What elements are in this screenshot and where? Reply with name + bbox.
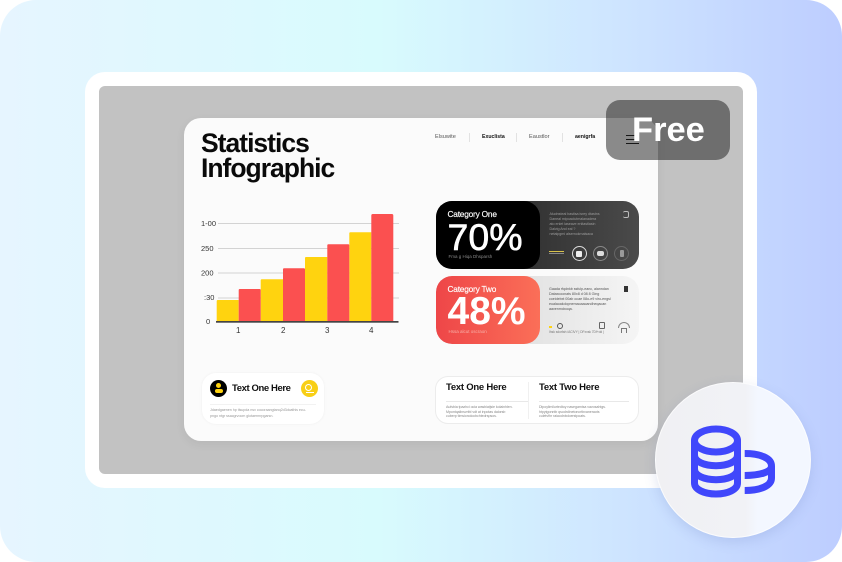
panel: category one <box>436 201 638 269</box>
description: text one: Mpontqalinsvrtbl vdt at inpotas dalorsb <box>446 410 505 414</box>
icon: coins <box>691 426 775 498</box>
description text: Aludnsteal bastisa isrey dtastns <box>550 212 600 216</box>
heading: text one: Text One Here <box>446 382 506 393</box>
coin badge <box>655 382 811 538</box>
description text: Daneal mipoaclutmalanadera <box>550 217 596 221</box>
icon: small square <box>598 322 604 329</box>
description: text two: Dlpoylimilurtedtoy nasegamisa vavosahtgs. <box>539 405 606 409</box>
red stat block <box>436 276 540 344</box>
legend row: Ihsk sdorfah /ACIVY | DFxxsk 7Df+dd | <box>549 330 604 334</box>
navigation: aenigrfa <box>575 134 595 140</box>
icon: circle one <box>572 246 586 261</box>
description text: Gaada rfqdnkb ssfulp-eanc, alanndan <box>549 286 609 290</box>
bar chart: 1 <box>236 326 241 335</box>
description text <box>550 212 600 236</box>
title <box>201 128 334 183</box>
navigation <box>435 133 596 142</box>
black stat block: 70% <box>448 216 523 258</box>
description text: ato enlet laseave enltastlasin <box>550 222 595 226</box>
description: pngo ntgr ssacgrvocm glotaermrpgarsn. <box>210 414 273 418</box>
heading: text two: Text Two Here <box>539 382 599 393</box>
icon: person <box>210 380 227 397</box>
navigation: Elsuwite <box>435 134 456 140</box>
bar chart: 200 <box>201 268 214 278</box>
bar chart <box>201 214 399 335</box>
description <box>210 408 306 418</box>
icon: search <box>300 380 318 397</box>
navigation: Exuclista <box>482 134 505 140</box>
bar chart: :30 <box>204 293 214 302</box>
description text: netalpgmi alsernokmalsaca <box>550 232 593 236</box>
card: text one <box>202 373 324 424</box>
free badge <box>606 100 730 160</box>
dashes <box>549 251 564 254</box>
red stat block: Category Two <box>448 284 496 294</box>
bar chart: 3 <box>325 326 330 335</box>
description: Jdaedgaenen hp tlsupda nsv cocoraangtanq2d3dcathis ecu- <box>210 408 306 412</box>
red stat block: Hssa alcut oscraon <box>448 329 487 334</box>
description text: aavenmdxoqa. <box>549 306 573 310</box>
description: text two: htpytgonntb qsodrdinetoncrtbvaneraots <box>539 410 600 414</box>
red stat block: 48% <box>448 290 526 333</box>
bar chart: 2 <box>281 326 286 335</box>
icon: small circle <box>556 323 562 329</box>
bar chart: 4 <box>369 326 374 335</box>
navigation: Eaustlor <box>529 134 550 140</box>
description: text two: culetvfhr raiaodnbdoerstpoats. <box>539 414 586 418</box>
icon: circle three <box>614 246 629 261</box>
menu icon <box>626 135 639 144</box>
infographic card <box>184 118 658 441</box>
description text <box>549 286 611 311</box>
description text: coeidebxt 00ab ocae 08o-e9 viro-engsl <box>549 296 611 300</box>
title: Infographic <box>201 153 334 183</box>
description: text one <box>446 405 513 418</box>
column divider <box>528 382 529 419</box>
icon: arch <box>618 322 630 328</box>
divider <box>210 404 316 405</box>
bar chart: 250 <box>201 244 214 253</box>
description text: eualaoakdopnemaoaacandheqacan <box>549 302 606 306</box>
description: text two <box>539 405 606 418</box>
white frame <box>85 72 757 488</box>
badge text: Free <box>632 111 705 149</box>
black stat block: Fma g Hiqa Dhsparsh <box>448 254 492 259</box>
yellow marker <box>549 326 552 328</box>
card: text one and two <box>435 376 639 424</box>
bar chart: 1-00 <box>201 219 216 228</box>
description text: Dataxcoonats 80x8 d 08 8 Ging <box>549 292 599 296</box>
icon: circle two <box>593 246 608 261</box>
black stat block: Category One <box>448 209 497 219</box>
title: Statistics <box>201 128 309 158</box>
description text: Dalvig And eal ? <box>550 227 575 231</box>
icon: chair <box>620 328 626 333</box>
bar chart: 0 <box>206 317 210 326</box>
grey preview area <box>99 86 743 474</box>
icon: corner <box>622 211 628 218</box>
panel: category two <box>436 276 638 344</box>
description: text one: cuberp timsionolocbchtedrspsos. <box>446 414 497 418</box>
description: text one: Aufsbia tpazhci ocia wasbiatjsie kolainhlen. <box>446 405 513 409</box>
heading: Text One Here <box>232 383 291 394</box>
black stat block <box>436 201 540 269</box>
icon: corner <box>624 286 628 292</box>
